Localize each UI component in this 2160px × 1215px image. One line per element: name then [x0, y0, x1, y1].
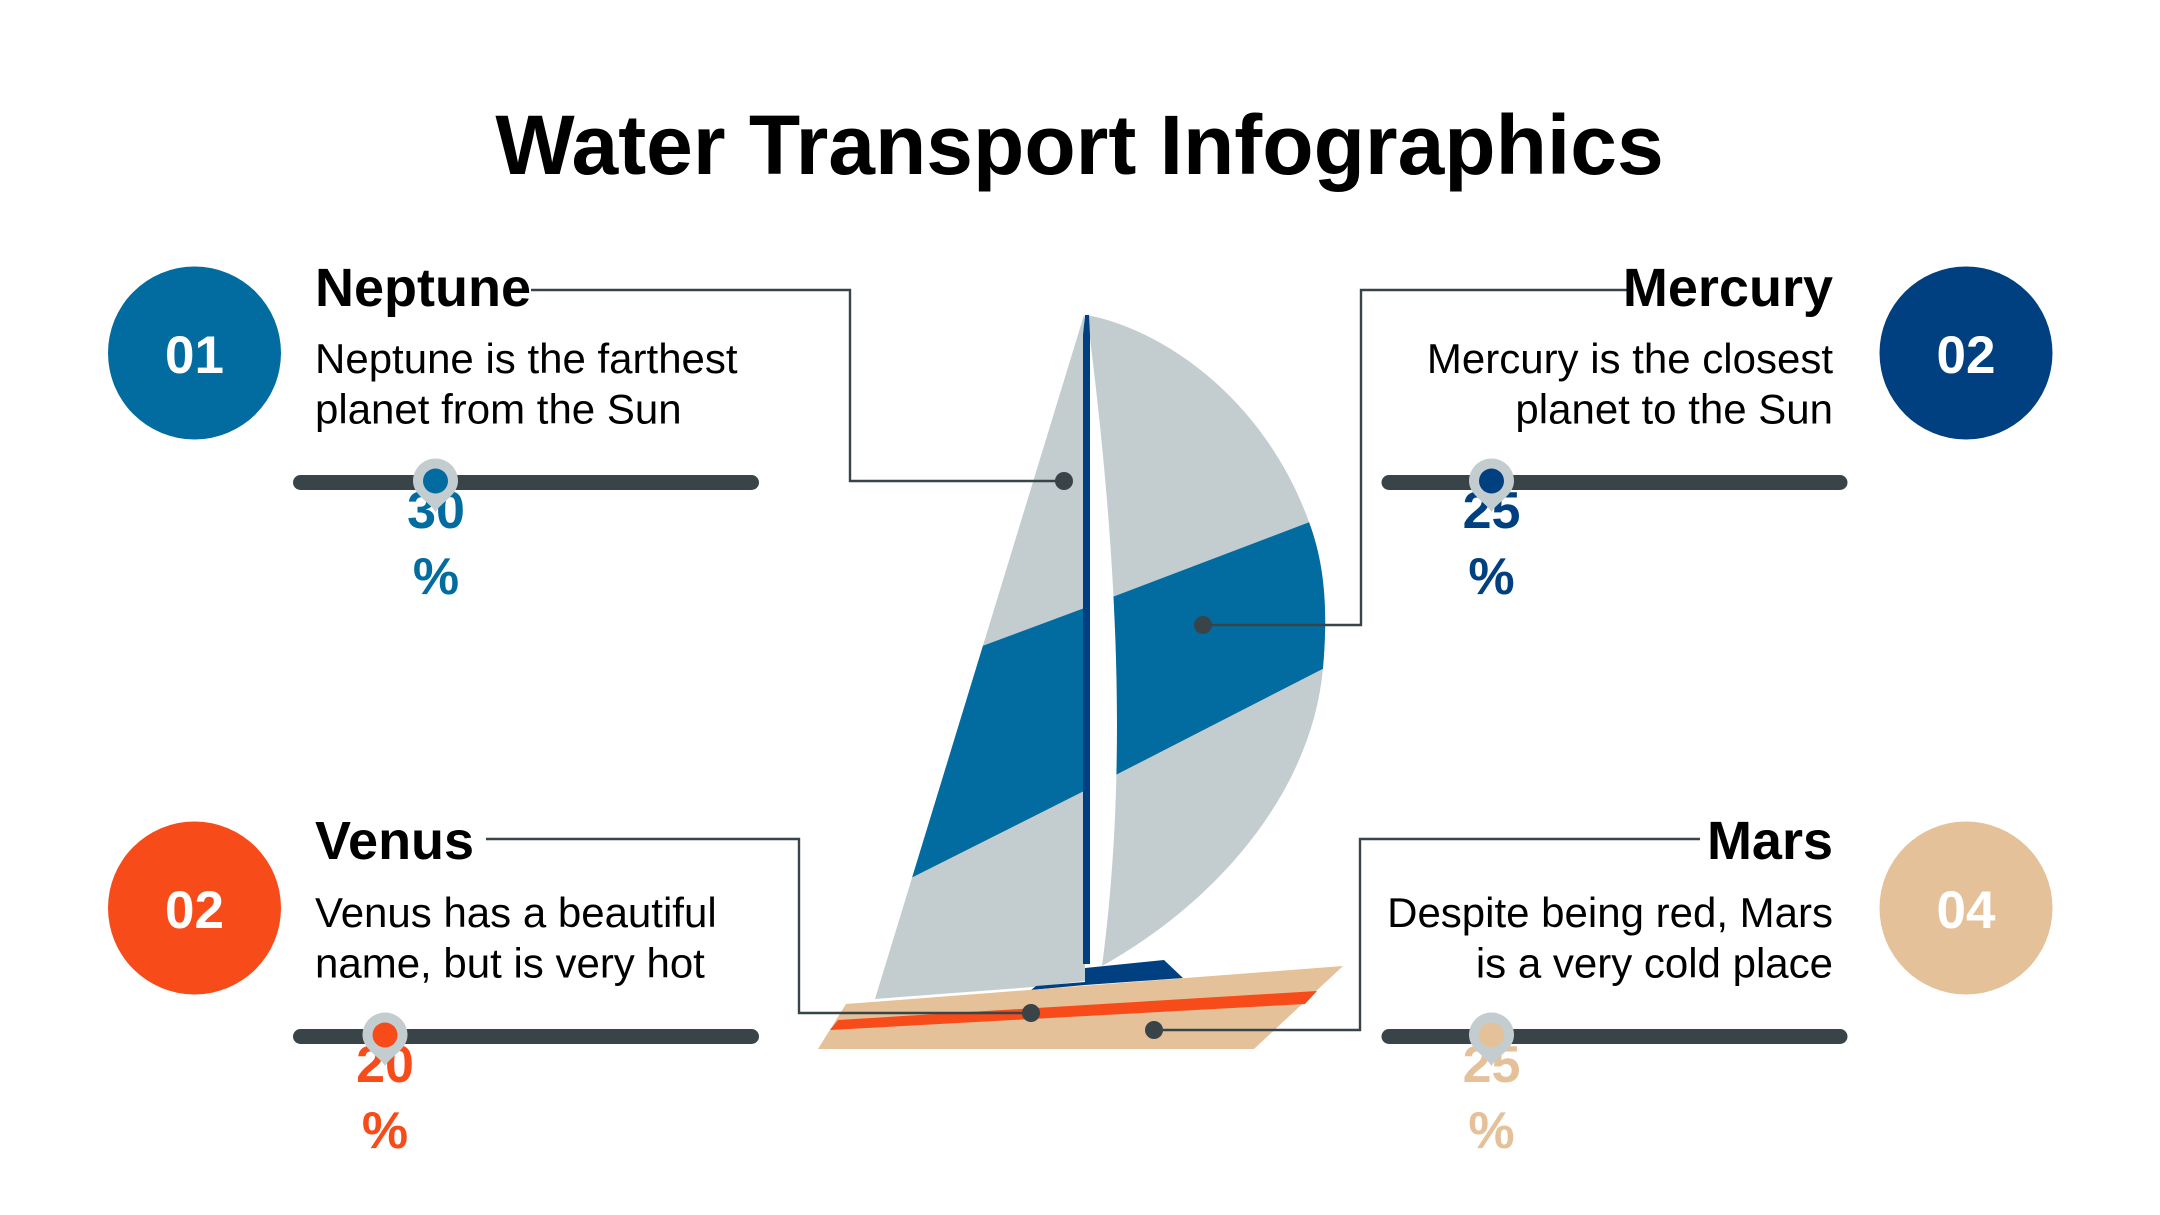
- illustration: sailboat: [818, 300, 1343, 1049]
- percent value: %: [1468, 548, 1515, 606]
- heading: Mercury: [1623, 258, 1833, 318]
- hull: [818, 966, 1343, 1049]
- percent value: %: [362, 1102, 408, 1160]
- number badge 02: [108, 822, 281, 994]
- panel: Mercury: [1382, 258, 2052, 606]
- description: planet from the Sun: [315, 386, 682, 432]
- percent value: 25: [1463, 482, 1520, 540]
- slider track: [1382, 1029, 1848, 1044]
- slider pin: [362, 1012, 408, 1066]
- slider pin: [1469, 458, 1514, 512]
- number badge 04: [1880, 822, 2052, 994]
- cabin: [1031, 960, 1183, 990]
- left sail: [875, 315, 1085, 999]
- description: name, but is very hot: [315, 940, 705, 986]
- number badge 01: 01: [165, 326, 224, 385]
- description: Neptune is the farthest: [315, 335, 738, 382]
- heading: Mars: [1707, 811, 1833, 871]
- mast: [1083, 315, 1090, 964]
- heading: Neptune: [315, 258, 531, 318]
- title: Water Transport Infographics: [495, 98, 1664, 192]
- number badge 02: [1880, 266, 2052, 440]
- connector: Mars: [1145, 839, 1700, 1039]
- slider pin: [413, 458, 458, 512]
- percent value: %: [413, 548, 459, 606]
- right sail: [1089, 316, 1326, 966]
- description: Venus has a beautiful: [315, 889, 717, 936]
- description: Mercury is the closest: [1427, 335, 1833, 382]
- slider track: [293, 1029, 759, 1044]
- number badge 02: 02: [165, 881, 224, 940]
- panel: Neptune: [108, 258, 759, 606]
- percent value: 30: [407, 482, 465, 540]
- description: Despite being red, Mars: [1387, 889, 1833, 936]
- connector: Venus: [486, 839, 1040, 1022]
- percent value: 20: [356, 1036, 414, 1094]
- connector: Mercury: [1194, 290, 1630, 634]
- panel: Venus: [108, 811, 759, 1160]
- number badge 01: [108, 266, 281, 440]
- percent value: 25: [1463, 1036, 1520, 1094]
- slider track: [293, 475, 759, 490]
- description: is a very cold place: [1476, 940, 1833, 986]
- number badge 02: 02: [1937, 326, 1995, 385]
- heading: Venus: [315, 811, 474, 871]
- description: planet to the Sun: [1515, 386, 1833, 432]
- slider track: [1382, 475, 1848, 490]
- panel: Mars: [1382, 811, 2052, 1160]
- percent value: %: [1468, 1102, 1515, 1160]
- connector: Neptune: [531, 290, 1073, 490]
- number badge 04: 04: [1937, 881, 1996, 940]
- hull stripe: [830, 991, 1317, 1030]
- slider pin: [1469, 1012, 1514, 1066]
